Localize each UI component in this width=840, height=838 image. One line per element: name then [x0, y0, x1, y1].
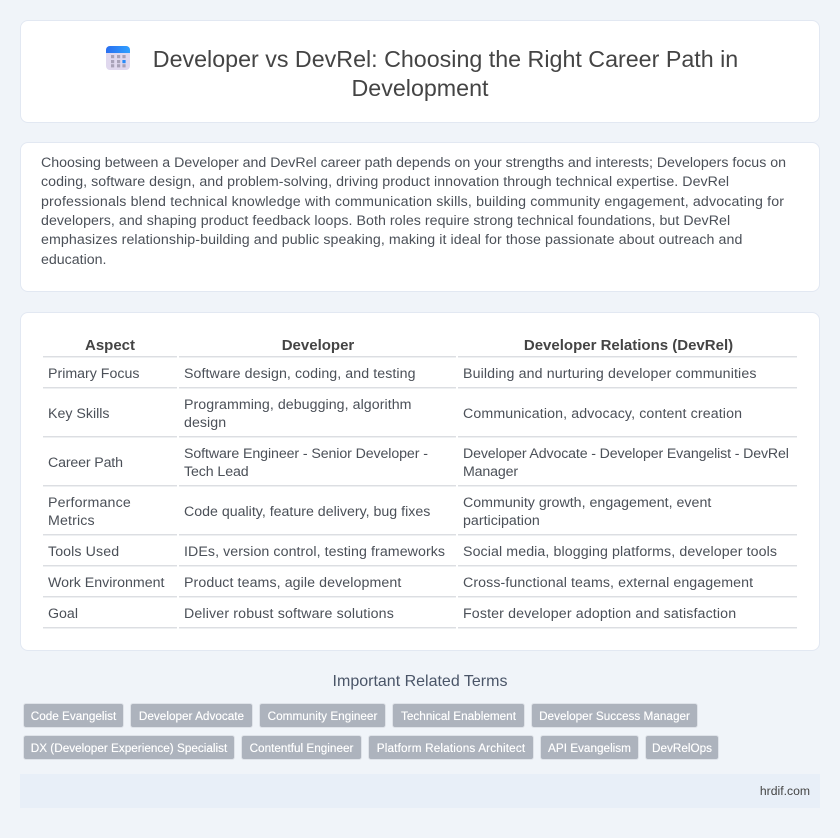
icon: calendar	[106, 46, 130, 70]
panel: comparison table	[20, 312, 820, 651]
header card	[20, 20, 820, 123]
related terms tags: API Evangelism	[548, 742, 631, 755]
related terms tags: Contentful Engineer	[250, 742, 353, 755]
table: Developer Advocate - Developer Evangelist - DevRel	[463, 446, 789, 462]
table: Software design, coding, and testing	[184, 366, 416, 382]
related terms tags: Technical Enablement	[401, 710, 516, 723]
intro text: Choosing between a Developer and DevRel career path depends on your strengths and interests; Developers focus on	[41, 155, 786, 171]
table: Social media, blogging platforms, developer tools	[463, 544, 777, 560]
table: Performance	[48, 495, 131, 511]
intro text: developers, and shaping product feedback loops. Both roles require strong technical foundations, but DevRel	[41, 213, 730, 229]
table: Manager	[463, 464, 518, 480]
related terms tags: Developer Advocate	[139, 710, 244, 723]
related terms tags: Community Engineer	[268, 710, 377, 723]
table: participation	[463, 513, 540, 529]
table: Tech Lead	[184, 464, 249, 480]
table: design	[184, 415, 226, 431]
table: Communication, advocacy, content creation	[463, 406, 742, 422]
table: Cross-functional teams, external engagement	[463, 575, 753, 591]
intro text: coding, software design, and problem-solving, driving product innovation through technical expertise. DevRel	[41, 174, 729, 190]
table: Aspect	[85, 337, 135, 354]
table: Work Environment	[48, 575, 164, 591]
table: Foster developer adoption and satisfaction	[463, 606, 736, 622]
intro text: education.	[41, 252, 106, 268]
related terms tags	[23, 703, 719, 760]
intro text	[41, 155, 786, 268]
table: Code quality, feature delivery, bug fixes	[184, 504, 430, 520]
table: Developer Relations (DevRel)	[524, 337, 733, 354]
table: Programming, debugging, algorithm	[184, 397, 412, 413]
table: Building and nurturing developer communities	[463, 366, 757, 382]
title: Developer vs DevRel: Choosing the Right Career Path in	[153, 46, 738, 72]
title	[153, 46, 738, 101]
table: Deliver robust software solutions	[184, 606, 394, 622]
title: Development	[352, 75, 488, 101]
table: Primary Focus	[48, 366, 139, 382]
related terms tags: Code Evangelist	[31, 710, 116, 723]
related terms tags: DevRelOps	[652, 742, 712, 755]
table: Software Engineer - Senior Developer -	[184, 446, 428, 462]
related terms tags: Developer Success Manager	[539, 710, 690, 723]
table: Community growth, engagement, event	[463, 495, 711, 511]
related terms tags: DX (Developer Experience) Specialist	[31, 742, 227, 755]
table: IDEs, version control, testing frameworks	[184, 544, 445, 560]
table: Metrics	[48, 513, 95, 529]
table: Developer	[282, 337, 354, 354]
related terms tags: Platform Relations Architect	[377, 742, 525, 755]
table: Career Path	[48, 455, 123, 471]
table: Product teams, agile development	[184, 575, 401, 591]
table: Goal	[48, 606, 78, 622]
footer bar	[20, 774, 820, 808]
footer source: hrdif.com	[760, 784, 810, 798]
related terms heading: Important Related Terms	[333, 673, 507, 690]
table: Tools Used	[48, 544, 119, 560]
table: Key Skills	[48, 406, 110, 422]
table	[43, 337, 797, 629]
intro text: emphasizes relationship-building and public speaking, making it ideal for those passionate about outreach and	[41, 232, 742, 248]
intro text: professionals blend technical knowledge with communication skills, building community engagement, advocating for	[41, 194, 784, 210]
panel: introduction	[20, 142, 820, 292]
